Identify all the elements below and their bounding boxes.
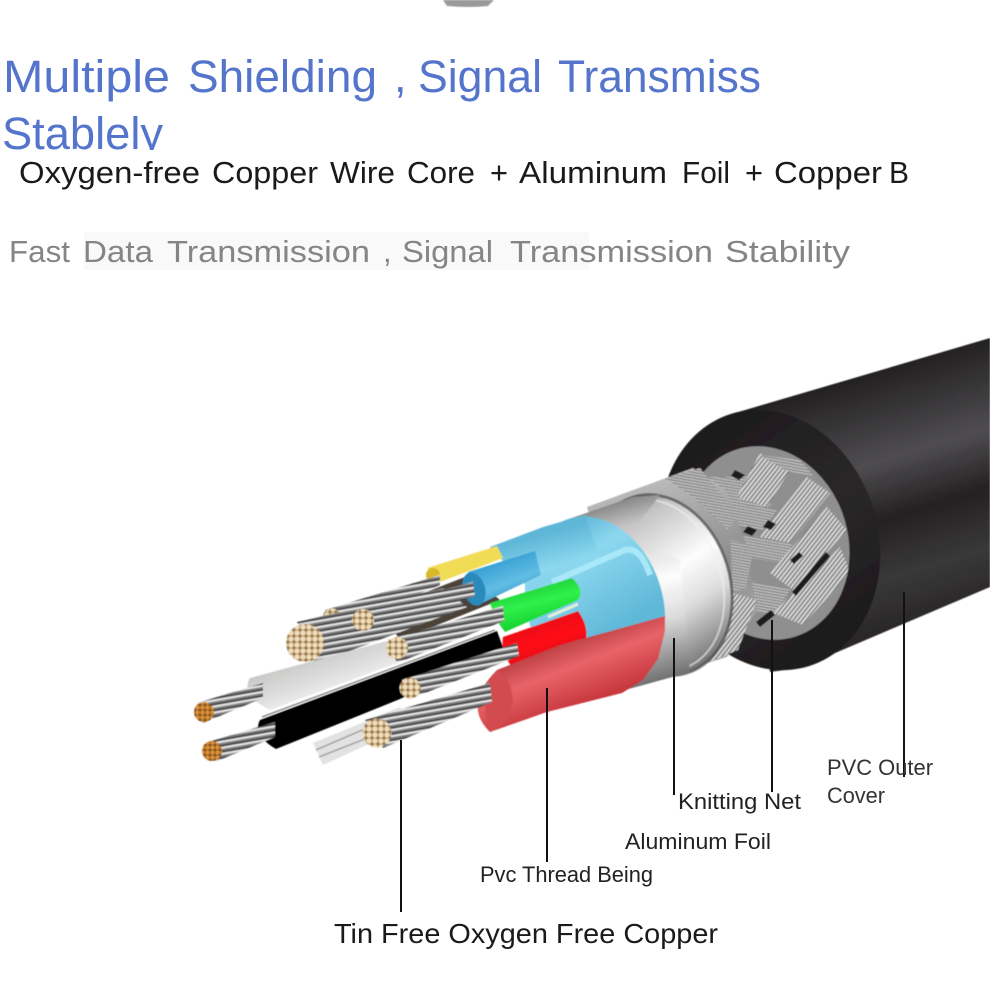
front tinned copper wire <box>362 683 492 748</box>
black insulated wire <box>202 630 504 762</box>
inner light blue tubes <box>490 499 686 711</box>
subtitle: materials: Copper <box>212 155 318 190</box>
top cropped gray shape <box>443 0 494 7</box>
blue tube with wire <box>352 551 541 634</box>
label: aluminum foil: Aluminum Foil <box>625 829 771 854</box>
title: Stablely <box>2 108 164 159</box>
tagline <box>9 232 851 270</box>
title: Shielding <box>188 51 377 102</box>
label: knitting net: Knitting Net <box>678 789 801 814</box>
tagline: Transmission <box>510 234 713 269</box>
subtitle: materials: Copper <box>774 155 882 190</box>
title <box>4 59 760 150</box>
label: PVC outer cover: PVC Outer <box>827 755 933 780</box>
tagline: Signal <box>402 234 493 269</box>
braid taper behind foil <box>587 468 757 684</box>
tagline: Data <box>83 234 154 269</box>
cable cross-section illustration <box>194 338 990 765</box>
bare strands back <box>286 575 467 664</box>
title: Transmiss <box>558 51 761 102</box>
tagline: Transmission <box>167 234 370 269</box>
dark shadow between strands <box>380 575 500 640</box>
subtitle: materials: Foil <box>682 155 730 190</box>
subtitle: materials: Core <box>407 155 475 190</box>
label: pvc thread being: Pvc Thread Being <box>480 862 653 887</box>
thin white strands <box>313 707 410 765</box>
aluminum foil <box>566 477 754 693</box>
PVC outer jacket <box>628 338 990 698</box>
label: tin free oxygen free copper: Tin Free Oxygen Free Copper <box>334 918 718 949</box>
subtitle: materials: Aluminum <box>519 155 667 190</box>
tagline: , <box>383 234 392 269</box>
tagline: Stability <box>725 234 851 269</box>
knitting net braid <box>703 445 850 641</box>
subtitle: materials: + <box>745 155 763 190</box>
tagline: Fast <box>9 234 70 269</box>
title: Multiple <box>3 51 170 102</box>
title: Signal <box>418 51 542 102</box>
label: PVC outer cover <box>827 755 933 808</box>
subtitle: materials: Wire <box>330 155 395 190</box>
title: , <box>394 51 407 102</box>
pvc pink tube <box>478 616 665 732</box>
subtitle: materials: Oxygen-free <box>19 155 200 190</box>
subtitle: materials: + <box>490 155 508 190</box>
subtitle: materials: B <box>889 155 909 190</box>
yellow wire <box>426 546 503 582</box>
subtitle: materials <box>19 155 909 190</box>
red tube with wire <box>400 604 587 699</box>
label: PVC outer cover: Cover <box>827 783 885 808</box>
pointer lines <box>401 592 904 912</box>
white insulated wire <box>194 641 400 723</box>
green tube with wire <box>386 578 580 663</box>
